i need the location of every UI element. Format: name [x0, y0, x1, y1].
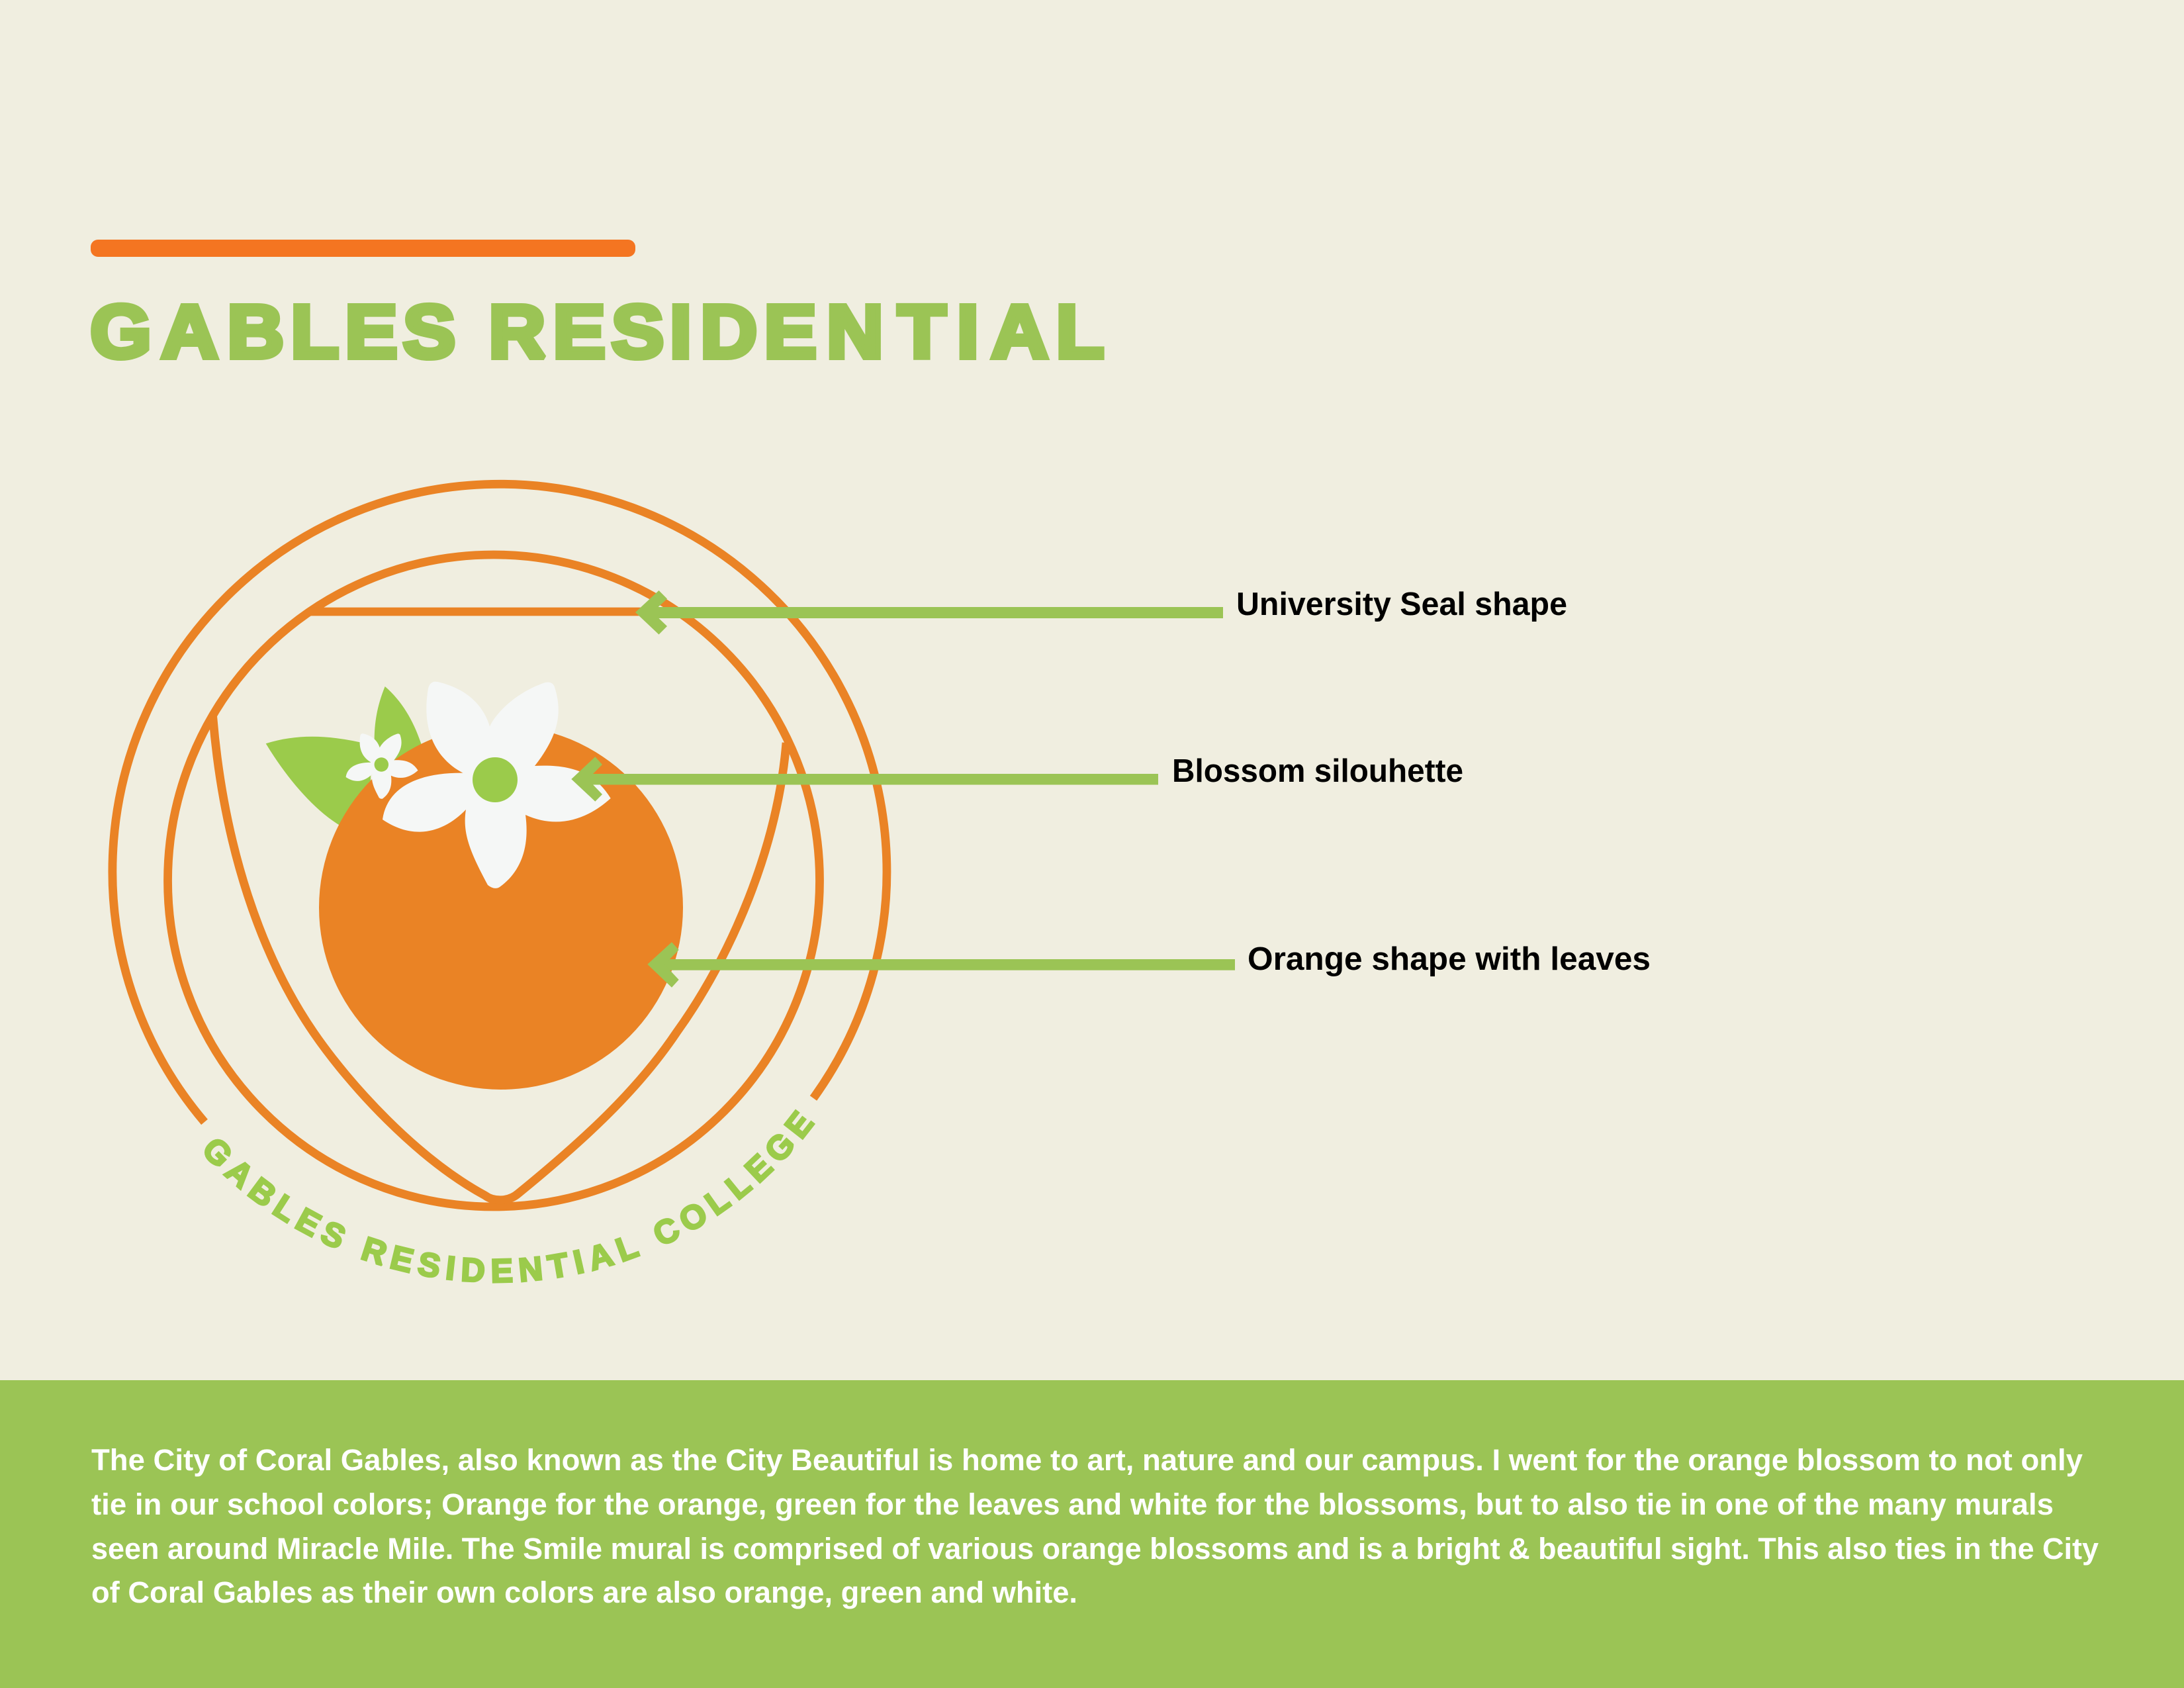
label: orange shape with leaves: Orange shape with leaves — [1248, 941, 1651, 977]
bottom description panel — [0, 1380, 2184, 1688]
arrow: orange shape with leaves — [647, 942, 1235, 988]
description text — [91, 1443, 2099, 1609]
description text: seen around Miracle Mile. The Smile mural is comprised of various orange blossoms and is a bright & beautiful sight. This also ties in the City — [91, 1532, 2099, 1566]
arrow: university seal shape — [635, 590, 1223, 634]
outer seal ring — [113, 484, 887, 1122]
description text: of Coral Gables as their own colors are also orange, green and white. — [91, 1575, 1077, 1609]
description text: tie in our school colors; Orange for the orange, green for the leaves and white for the blossoms, but to also tie in one of the many murals — [91, 1487, 2054, 1521]
curved seal text: GABLES RESIDENTIAL COLLEGE — [204, 1109, 815, 1284]
label: university seal shape: University Seal shape — [1236, 586, 1567, 622]
arrow: blossom silhouette — [571, 757, 1158, 802]
title: GABLES RESIDENTIAL — [90, 290, 1104, 373]
large blossom — [383, 682, 611, 888]
panel background — [0, 1380, 2184, 1688]
small blossom — [346, 733, 418, 799]
university seal shield shape — [213, 612, 786, 1200]
orange fruit — [319, 726, 683, 1090]
seal logo — [108, 479, 891, 1284]
inner seal ring — [168, 555, 819, 1207]
label: blossom silhouette: Blossom silouhette — [1172, 753, 1463, 789]
orange accent bar — [91, 240, 635, 257]
leaves — [266, 686, 430, 861]
description text: The City of Coral Gables, also known as the City Beautiful is home to art, nature and our campus. I went for the orange blossom to not only — [91, 1443, 2083, 1477]
